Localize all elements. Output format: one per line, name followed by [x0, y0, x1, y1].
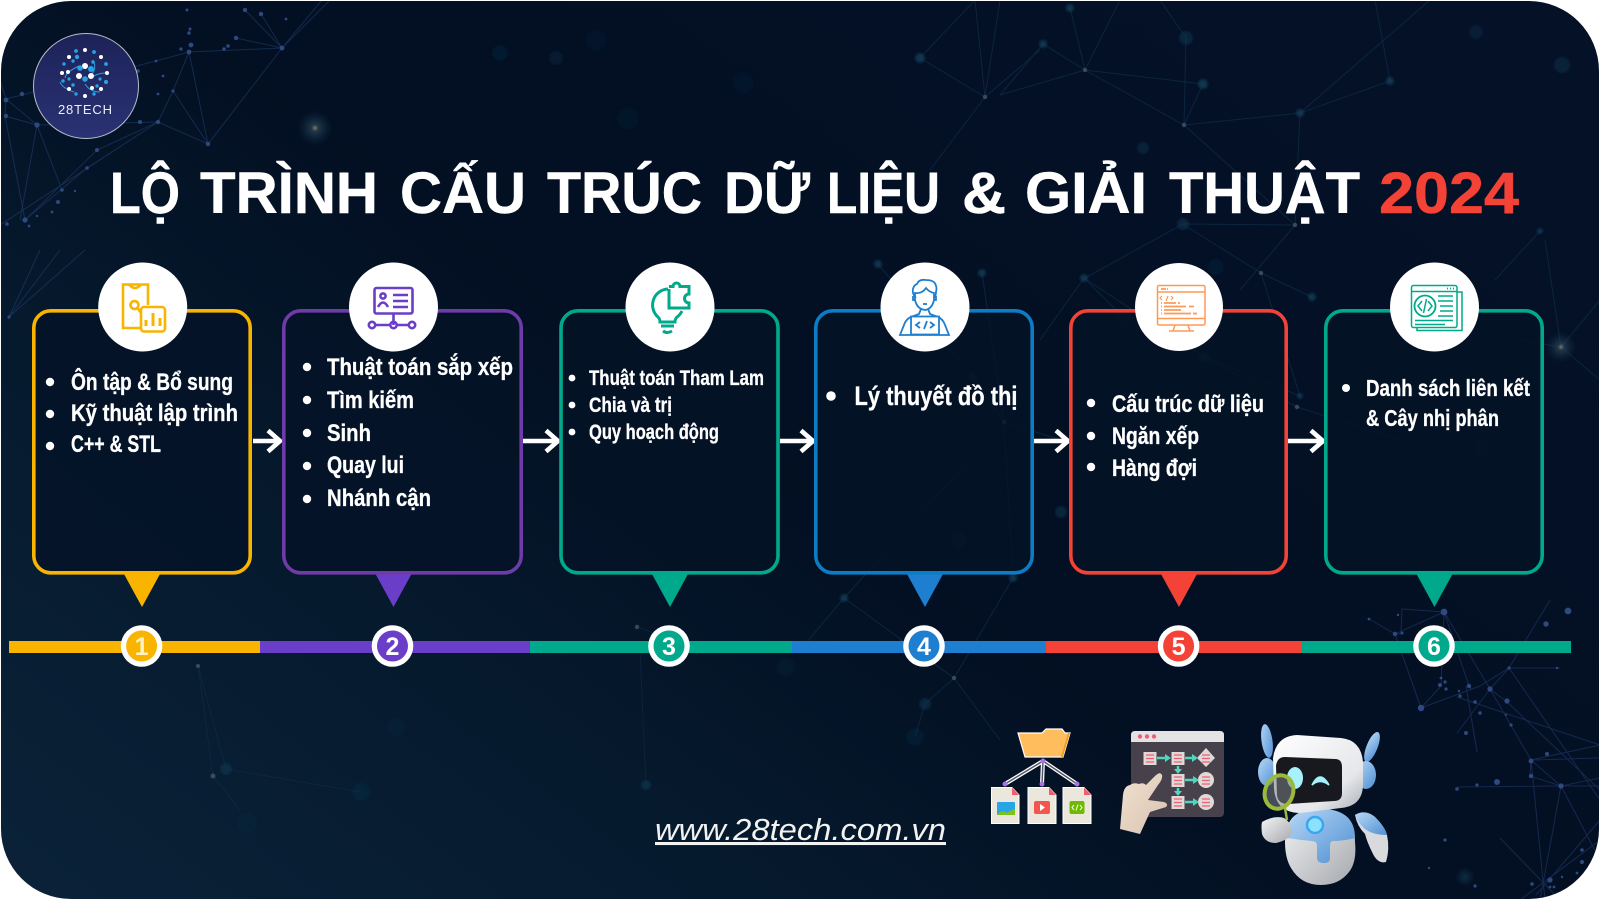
arrow 5 to 6: [1288, 430, 1323, 452]
step number 5: [1158, 625, 1199, 667]
arrow 1 to 2: [253, 430, 280, 452]
step number 1: 1: [135, 633, 149, 661]
panel: step 2: [284, 262, 521, 607]
website url: www.28tech.com.vn: [655, 813, 946, 847]
list: step 3: Chia và trị: [589, 394, 672, 417]
illustration: folder tree: [992, 729, 1091, 824]
list: step 2: Nhánh cận: [327, 485, 431, 512]
list: step 1: Ôn tập & Bổ sung: [71, 368, 233, 396]
list: step 6: Danh sách liên kết: [1366, 375, 1530, 401]
title: LIỆU: [827, 161, 940, 226]
list: step 4: Lý thuyết đồ thị: [854, 381, 1018, 411]
arrow 4 to 5: [1034, 430, 1068, 452]
list: step 2: Thuật toán sắp xếp: [327, 353, 513, 381]
arrow 3 to 4: [780, 430, 813, 452]
list: step 6: & Cây nhị phân: [1366, 405, 1499, 431]
list: step 3: Thuật toán Tham Lam: [589, 367, 764, 390]
title: [110, 161, 1519, 226]
title: GIẢI: [1025, 161, 1147, 226]
step number 3: [648, 625, 690, 667]
title: &: [962, 161, 1006, 226]
step number 2: [372, 625, 413, 667]
list: step 2: Sinh: [327, 420, 371, 447]
panel: step 6: [1326, 262, 1542, 607]
panel: step 1: [34, 262, 250, 607]
list: step 3: [569, 367, 764, 444]
icon: code monitor: [1158, 286, 1205, 331]
list: step 2: [303, 353, 513, 512]
illustration: robot with magnifier: [1258, 723, 1388, 885]
icon: code window: [1412, 286, 1462, 330]
title: CẤU: [400, 161, 526, 226]
list: step 3: Quy hoạch động: [589, 421, 719, 444]
title: DỮ: [724, 161, 811, 226]
step number 6: 6: [1427, 633, 1441, 661]
list: step 5: Ngăn xếp: [1112, 423, 1199, 450]
list: step 1: C++ & STL: [71, 431, 161, 458]
arrow 2 to 3: [523, 430, 558, 452]
title: TRÌNH: [200, 161, 378, 226]
logo: 28TECH: 28TECH: [58, 102, 112, 117]
title: THUẬT: [1169, 161, 1360, 226]
list: step 2: Tìm kiếm: [327, 387, 414, 414]
logo: 28TECH: [34, 34, 138, 138]
icon: light bulb and puzzle: [653, 283, 689, 332]
step number 4: [903, 625, 945, 667]
list: step 1: [46, 368, 238, 458]
step number 2: 2: [386, 633, 399, 661]
list: step 5: [1087, 391, 1264, 482]
icon: profile board network: [369, 288, 415, 328]
list: step 6: [1342, 375, 1530, 431]
title: 2024: [1379, 161, 1519, 226]
icon: phone and chart: [123, 284, 165, 332]
title: TRÚC: [547, 161, 702, 226]
list: step 5: Cấu trúc dữ liệu: [1112, 391, 1264, 418]
list: step 1: Kỹ thuật lập trình: [71, 400, 238, 427]
step number 5: 5: [1172, 633, 1186, 661]
timeline bar: [9, 641, 1571, 653]
panel: step 5: [1071, 263, 1286, 607]
list: step 2: Quay lui: [327, 452, 404, 479]
step number 6: [1413, 625, 1455, 667]
panel: step 4: [816, 262, 1032, 607]
step number 1: [121, 625, 162, 667]
list: step 5: Hàng đợi: [1112, 455, 1197, 482]
illustration: flowchart window with hand: [1120, 731, 1224, 834]
icon: programmer with laptop: [900, 280, 949, 335]
title: LỘ: [110, 161, 180, 226]
step number 3: 3: [662, 633, 676, 661]
panel: step 3: [561, 262, 778, 607]
step number 4: 4: [917, 633, 931, 661]
